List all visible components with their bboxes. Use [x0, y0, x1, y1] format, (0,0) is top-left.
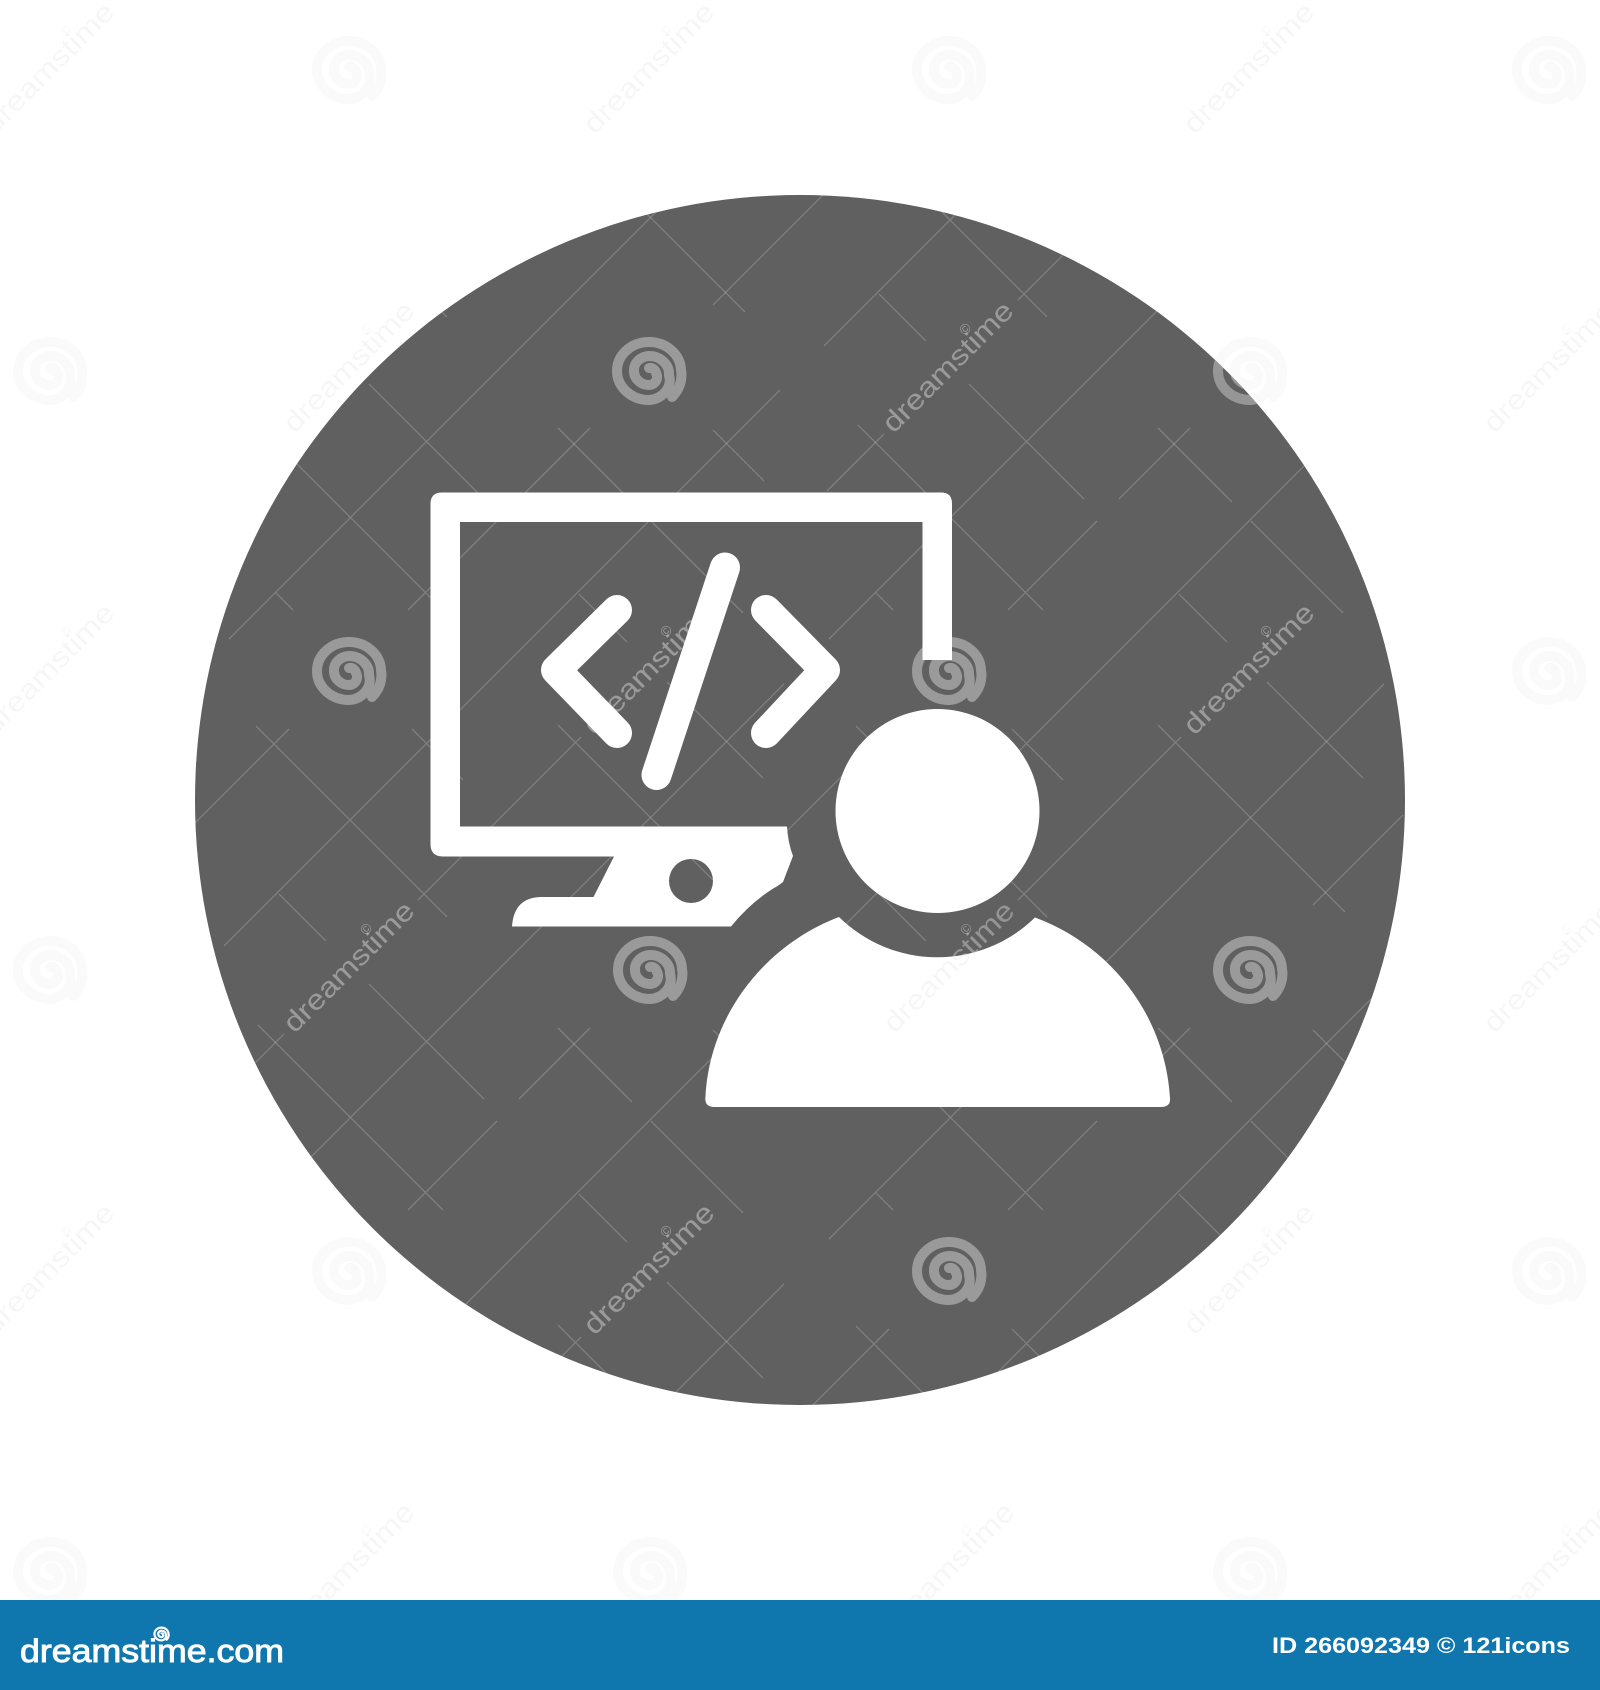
watermark: wordmarks on badge: dreamstime	[577, 1197, 720, 1340]
icon: code brackets	[556, 568, 825, 775]
watermark: faint wordmarks on white: ©	[1557, 319, 1576, 338]
watermark: faint wordmarks on white: dreamstime	[877, 1496, 1020, 1639]
icon: monitor with stand	[430, 492, 952, 926]
watermark: diagonal lines	[113, 84, 1403, 1546]
watermark: faint wordmarks on white: ©	[657, 20, 676, 39]
watermark: wordmarks on badge	[272, 290, 1320, 1340]
watermark: faint wordmarks on white: dreamstime	[1477, 295, 1600, 438]
watermark: wordmarks on badge: dreamstime	[876, 295, 1019, 438]
watermark: spirals on badge	[317, 342, 1282, 1300]
watermark: wordmarks on badge: dreamstime	[1177, 597, 1320, 740]
watermark: wordmarks on badge: ©	[357, 919, 376, 938]
watermark: wordmarks on badge: dreamstime	[277, 295, 420, 438]
watermark: wordmarks on badge: dreamstime	[277, 895, 420, 1038]
watermark: faint wordmarks on white: dreamstime	[1477, 1496, 1600, 1639]
watermark: faint wordmarks on white: dreamstime	[277, 295, 420, 438]
watermark: wordmarks on badge: ©	[357, 319, 376, 338]
watermark: faint wordmarks on white: ©	[1557, 919, 1576, 938]
icon: person shoulders	[705, 917, 1170, 1107]
watermark: wordmarks on badge: dreamstime	[877, 895, 1020, 1038]
watermark: wordmarks on badge: ©	[657, 621, 676, 640]
watermark: faint wordmarks on white: dreamstime	[1177, 0, 1320, 139]
watermark: faint wordmarks on white: ©	[357, 319, 376, 338]
watermark: faint wordmarks on white: ©	[1257, 1221, 1276, 1240]
grey circle badge	[195, 195, 1405, 1405]
watermark: faint wordmarks on white: ©	[1557, 1520, 1576, 1539]
watermark: faint wordmarks on white: ©	[1257, 20, 1276, 39]
watermark: faint wordmarks on white: ©	[57, 20, 76, 39]
watermark: faint wordmarks on white: ©	[357, 1520, 376, 1539]
watermark: faint wordmarks on white: dreamstime	[1177, 1197, 1320, 1340]
watermark: faint wordmarks on white: ©	[957, 919, 976, 938]
watermark: faint wordmarks on white: ©	[957, 1520, 976, 1539]
watermark: wordmarks on badge: ©	[957, 919, 976, 938]
watermark: wordmarks on badge: ©	[1257, 621, 1276, 640]
watermark: faint wordmarks on white: ©	[57, 621, 76, 640]
watermark: faint wordmarks on white: dreamstime	[577, 0, 720, 139]
watermark: faint wordmarks on white: dreamstime	[277, 1496, 420, 1639]
icon: person head	[836, 709, 1040, 913]
footer banner	[0, 1600, 1600, 1690]
footer logo text: dreamstime.com	[20, 1633, 284, 1669]
watermark: faint wordmarks on white: ©	[57, 1221, 76, 1240]
footer logo spiral	[154, 1628, 169, 1640]
watermark: wordmarks on badge: ©	[657, 1221, 676, 1240]
icon: developer at computer	[430, 492, 1170, 1107]
watermark: wordmarks on badge: dreamstime	[577, 597, 720, 740]
watermark: faint wordmarks on white: dreamstime	[877, 895, 1020, 1038]
footer image id and credit: ID 266092349 © 121icons	[1272, 1633, 1570, 1658]
watermark: faint wordmarks on white: dreamstime	[1477, 895, 1600, 1038]
watermark: wordmarks on badge: ©	[956, 319, 975, 338]
